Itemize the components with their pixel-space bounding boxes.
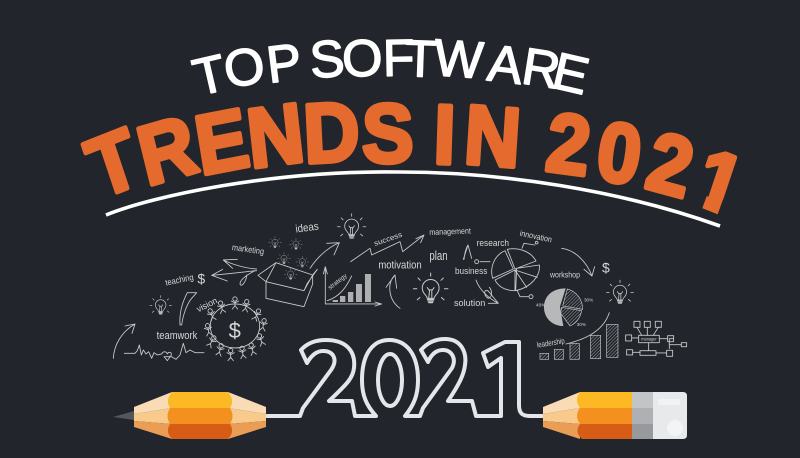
icon: small bulbs	[269, 237, 309, 279]
arrow: box to bulb	[310, 243, 339, 268]
ring of people: $	[229, 318, 241, 343]
flowchart: manager	[641, 336, 657, 341]
label: teaching: teaching	[164, 272, 195, 288]
label: success: success	[373, 230, 404, 248]
pencil wood	[134, 392, 172, 414]
icon: teamwork bulb	[150, 296, 171, 314]
label: management: management	[429, 226, 472, 237]
ring of people	[204, 297, 268, 361]
label: solution: solution	[454, 298, 485, 308]
icon: large bulb	[337, 214, 366, 238]
loop arrow	[476, 280, 498, 303]
2021 outline line	[267, 339, 545, 416]
pencil wood	[543, 392, 580, 414]
icon: dollar right: $	[602, 260, 610, 276]
chart: solid pie: 30%	[584, 297, 593, 302]
pencil body	[168, 392, 232, 408]
arrow: rising	[113, 324, 135, 358]
label: workshop: workshop	[549, 270, 580, 280]
arrows left	[212, 259, 257, 285]
chart: solid pie: 30%	[577, 322, 586, 327]
left pencil	[113, 392, 266, 439]
ferrule	[632, 392, 653, 408]
label: motivation: motivation	[378, 259, 422, 271]
title: trends in 2021: TRENDS IN 2021	[76, 85, 754, 235]
pencil lead	[113, 411, 134, 420]
pencil body	[577, 392, 632, 408]
chart: sketched pie	[475, 241, 539, 299]
arrow: up left	[180, 293, 197, 325]
label: ideas: ideas	[295, 220, 320, 236]
icon: plan bulb	[413, 273, 448, 303]
arrow: up small	[463, 245, 472, 259]
label: business: business	[455, 266, 488, 276]
sketches: left cluster	[113, 214, 382, 361]
chart: rising bars	[540, 313, 618, 359]
icon: dollar: $	[197, 270, 205, 286]
right pencil	[543, 392, 687, 439]
title: top software: TOP SOFTWARE	[188, 29, 594, 108]
icon: open box	[258, 263, 317, 307]
eraser	[653, 392, 687, 439]
chart: solid pie: 40%	[536, 303, 545, 308]
label: plan: plan	[429, 249, 448, 263]
heartbeat line	[124, 343, 204, 361]
chart: solid pie	[536, 288, 593, 327]
label: teamwork: teamwork	[157, 330, 198, 342]
curved arrow	[562, 248, 595, 276]
flowchart	[626, 321, 687, 356]
sketches: center and right cluster	[351, 226, 687, 359]
arrow: motivation up	[386, 275, 400, 308]
icon: right bulb	[606, 280, 633, 303]
curved underline	[106, 172, 720, 226]
arrow: success zigzag	[351, 235, 424, 262]
label: research: research	[477, 238, 509, 248]
label: marketing: marketing	[231, 242, 265, 256]
chart: strategy	[323, 267, 382, 306]
label: innovation: innovation	[519, 228, 553, 244]
label: vision: vision	[195, 295, 219, 314]
chart: strategy: strategy	[327, 272, 349, 292]
label: leadership: leadership	[536, 336, 566, 350]
